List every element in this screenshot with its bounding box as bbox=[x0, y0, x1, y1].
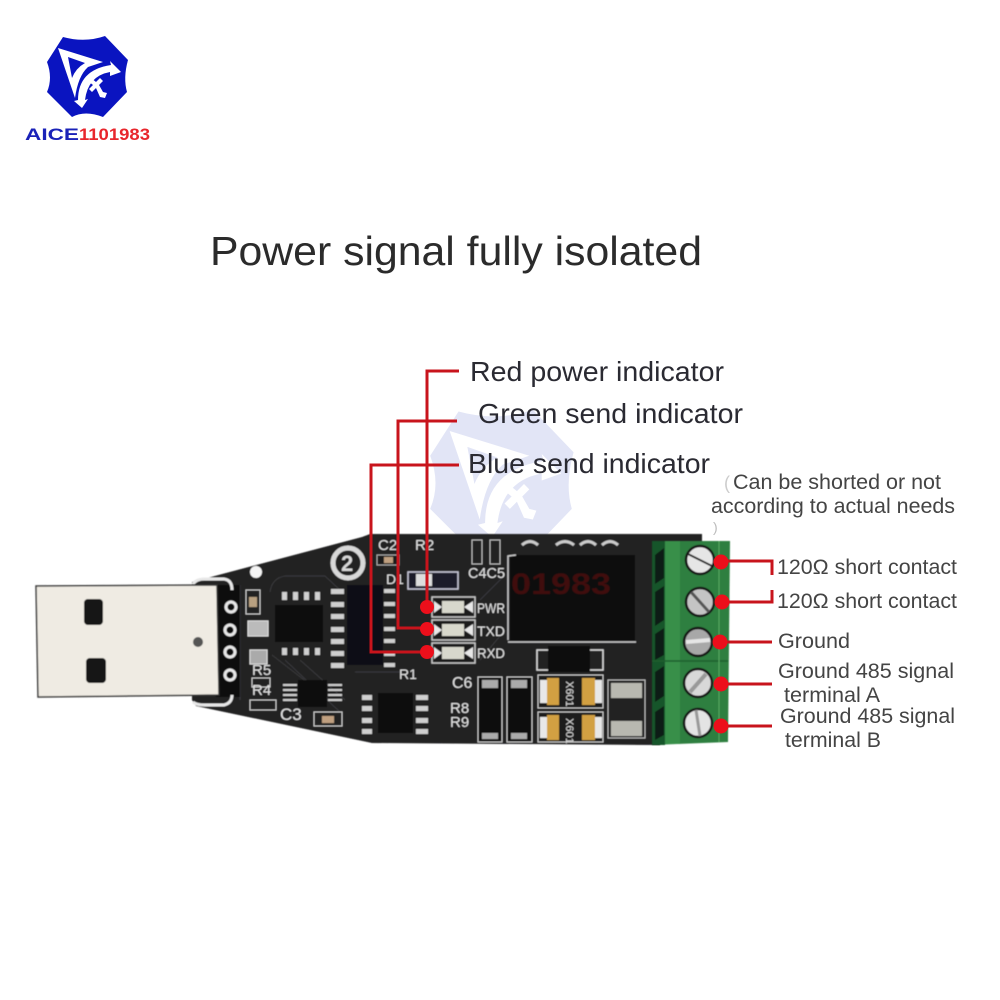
board silkscreen labels: C4C5 bbox=[468, 565, 505, 582]
board silkscreen labels: R8 bbox=[450, 700, 469, 717]
logo: Aice1101983 shield: AICE bbox=[25, 125, 79, 144]
board silkscreen labels: F2 bbox=[615, 703, 633, 720]
terminal labels: 120Ω short contact bbox=[777, 590, 957, 613]
title: Power signal fully isolated bbox=[210, 228, 702, 274]
board silkscreen labels: D1 bbox=[386, 571, 404, 587]
board silkscreen labels bbox=[252, 537, 633, 731]
terminal labels: Ground bbox=[778, 630, 850, 653]
indicator labels: Blue send indicator bbox=[468, 448, 710, 479]
terminal leader lines bbox=[712, 554, 772, 734]
fuses bbox=[538, 675, 603, 744]
IC and components, left section bbox=[246, 548, 428, 734]
PCB traces bbox=[240, 575, 505, 712]
jumper bbox=[537, 646, 603, 672]
shorting note bbox=[711, 471, 955, 535]
board silkscreen labels: R1 bbox=[399, 666, 417, 682]
terminal labels: terminal A bbox=[784, 684, 880, 707]
board silkscreen labels: R9 bbox=[450, 714, 469, 731]
terminal labels: Ground 485 signal bbox=[780, 705, 955, 728]
terminal labels: terminal B bbox=[785, 729, 881, 752]
board silkscreen labels: R5 bbox=[252, 662, 271, 679]
board silkscreen labels: TXD bbox=[477, 623, 505, 639]
screw 4 bbox=[684, 669, 712, 697]
terminal block bbox=[652, 541, 730, 745]
circuit board bbox=[192, 534, 702, 745]
shorting note: ) bbox=[713, 519, 718, 535]
board silkscreen labels: C2 bbox=[378, 537, 397, 554]
fuses: X601 bbox=[563, 718, 575, 744]
shorting note: Can be shorted or not bbox=[733, 471, 941, 494]
USB pin strip, metal tabs and pads bbox=[193, 579, 240, 705]
watermark shield bbox=[430, 410, 574, 553]
indicator labels bbox=[468, 356, 743, 479]
logo: Aice1101983 shield: 1101983 bbox=[79, 125, 150, 144]
IC and components, left section: 2 bbox=[341, 551, 353, 576]
indicator labels: Red power indicator bbox=[470, 356, 724, 387]
indicator leader lines bbox=[371, 371, 459, 659]
relay with watermark text bbox=[508, 542, 636, 642]
board silkscreen labels: R4 bbox=[252, 682, 271, 699]
screw 5 bbox=[684, 709, 712, 737]
screw 2 bbox=[686, 588, 714, 616]
terminal labels bbox=[777, 556, 957, 752]
shorting note: ( bbox=[724, 473, 730, 493]
USB connector bbox=[36, 585, 219, 697]
F2 fuse and diodes bbox=[378, 677, 645, 742]
screw 3 bbox=[684, 628, 712, 656]
other components, top row bbox=[377, 540, 500, 589]
screw 1 bbox=[686, 546, 714, 574]
board silkscreen labels: C3 bbox=[280, 705, 302, 724]
terminal labels: 120Ω short contact bbox=[777, 556, 957, 579]
board silkscreen labels: R2 bbox=[415, 537, 434, 554]
board silkscreen labels: C6 bbox=[452, 675, 473, 692]
terminal labels: Ground 485 signal bbox=[778, 660, 954, 683]
board silkscreen labels: PWR bbox=[477, 600, 505, 616]
indicator labels: Green send indicator bbox=[478, 398, 743, 429]
relay with watermark text: 01983 bbox=[511, 568, 611, 601]
shorting note: according to actual needs bbox=[711, 495, 955, 518]
LEDs bbox=[432, 597, 475, 663]
board silkscreen labels: RXD bbox=[477, 645, 505, 661]
fuses: X601 bbox=[563, 681, 575, 707]
logo: Aice1101983 shield bbox=[25, 36, 150, 144]
